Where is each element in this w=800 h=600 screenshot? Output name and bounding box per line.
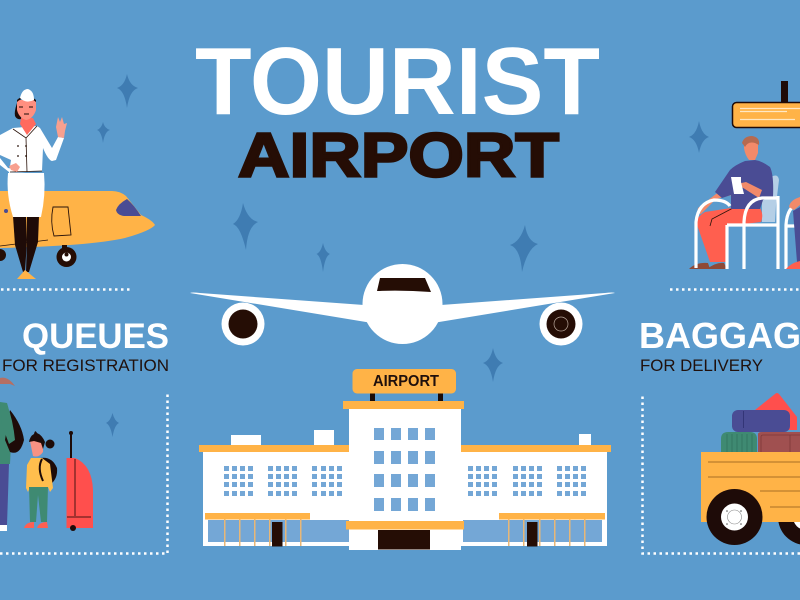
- head: [15, 103, 22, 119]
- heading: queues: QUEUES: [22, 317, 169, 356]
- left wing: [199, 430, 350, 546]
- white chair frame: [696, 196, 778, 269]
- airport building: [199, 369, 611, 550]
- title: tourist: TOURIST: [195, 28, 600, 135]
- dotted frame: queues: [0, 393, 168, 554]
- subheading: for delivery: FOR DELIVERY: [640, 356, 763, 375]
- decorative stars: [97, 74, 709, 437]
- central tower: [343, 393, 464, 550]
- man legs: [696, 208, 762, 262]
- title: airport: AIRPORT: [238, 122, 559, 190]
- flight attendant: [0, 89, 67, 279]
- direction sign, right: [732, 81, 800, 128]
- chair back cushion: [762, 176, 779, 222]
- next chair: [786, 203, 800, 269]
- man torso: [715, 160, 773, 209]
- man shoes: [689, 263, 727, 269]
- baggage cart: [701, 393, 800, 545]
- seated passengers and chairs: [689, 136, 800, 269]
- hands: [56, 117, 67, 138]
- traveller child: [24, 431, 57, 528]
- dotted line: top left: [1, 288, 130, 291]
- legs: [13, 216, 27, 272]
- dotted line: top right: [670, 288, 800, 291]
- airport sign: AIRPORT: [373, 373, 440, 390]
- hat: [20, 89, 34, 102]
- man head: [744, 140, 758, 160]
- airport sign: [352, 369, 456, 394]
- cup: [731, 177, 744, 194]
- man right forearm: [737, 182, 762, 198]
- man forearm: [697, 190, 732, 214]
- icon: airplane front view: [190, 264, 615, 346]
- right wing: [460, 434, 611, 546]
- next passenger: [789, 197, 800, 210]
- shoes: [17, 270, 36, 279]
- dotted frame: baggage: [642, 393, 800, 554]
- skirt: [8, 173, 45, 217]
- neck and scarf: [20, 118, 36, 135]
- yellow plane, left: [0, 191, 155, 267]
- jacket: [0, 126, 64, 173]
- subheading: for registration: FOR REGISTRATION: [2, 356, 169, 375]
- traveller adult: [0, 378, 24, 531]
- red suitcase: [66, 431, 93, 531]
